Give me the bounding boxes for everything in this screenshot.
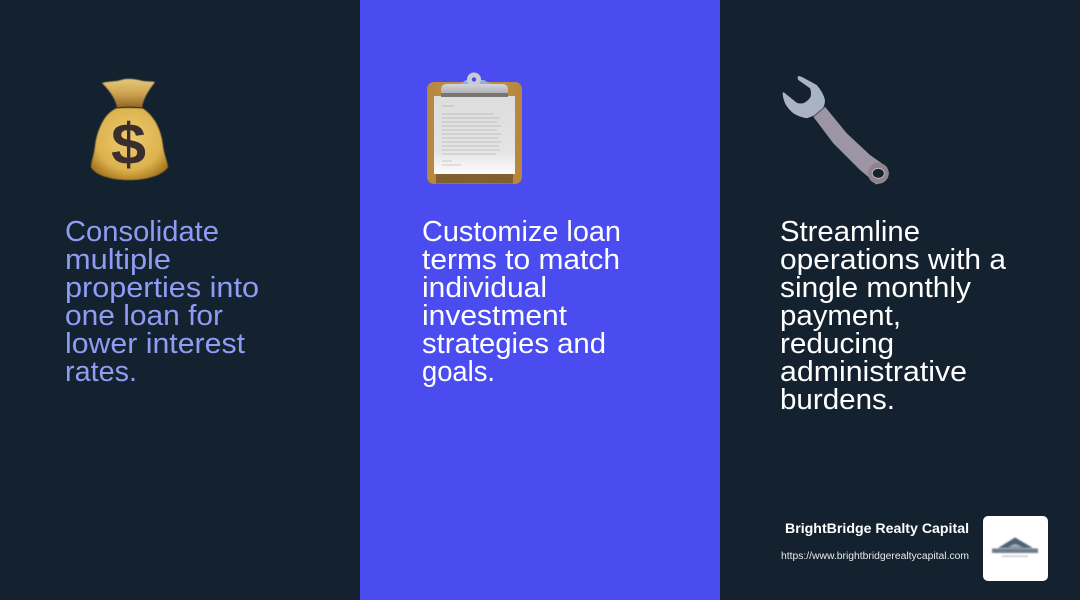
logo tile <box>983 516 1048 581</box>
panel: customize <box>360 0 720 600</box>
text: streamline: operations with a <box>780 244 1006 276</box>
text: consolidate <box>65 216 259 388</box>
text: consolidate: multiple <box>65 244 171 276</box>
text: consolidate: one loan for <box>65 300 224 332</box>
footer: company branding <box>781 516 1048 581</box>
icon: clipboard <box>427 72 522 184</box>
text: streamline: single monthly <box>780 272 972 304</box>
panel: consolidate <box>0 0 360 600</box>
text: customize <box>422 216 621 388</box>
text: consolidate: Consolidate <box>65 216 219 248</box>
text: customize: investment <box>422 300 567 332</box>
text: consolidate: lower interest <box>65 328 245 360</box>
text: customize: strategies and <box>422 328 606 360</box>
text: customize: Customize loan <box>422 216 621 248</box>
text: streamline: payment, <box>780 300 901 332</box>
company name: BrightBridge Realty Capital <box>785 521 969 536</box>
icon: money bag <box>91 79 168 180</box>
text: streamline: Streamline <box>780 216 920 248</box>
text: streamline <box>780 216 1006 416</box>
text: consolidate: rates. <box>65 356 137 388</box>
icon: money bag: $ <box>111 112 146 177</box>
text: customize: terms to match <box>422 244 620 276</box>
icon: wrench <box>783 76 889 184</box>
company url: https://www.brightbridgerealtycapital.com <box>781 551 969 562</box>
text: streamline: burdens. <box>780 384 895 416</box>
text: customize: individual <box>422 272 547 304</box>
text: customize: goals. <box>422 356 495 388</box>
text: streamline: administrative <box>780 356 967 388</box>
text: streamline: reducing <box>780 328 894 360</box>
text: consolidate: properties into <box>65 272 259 304</box>
panel: streamline <box>720 0 1080 600</box>
